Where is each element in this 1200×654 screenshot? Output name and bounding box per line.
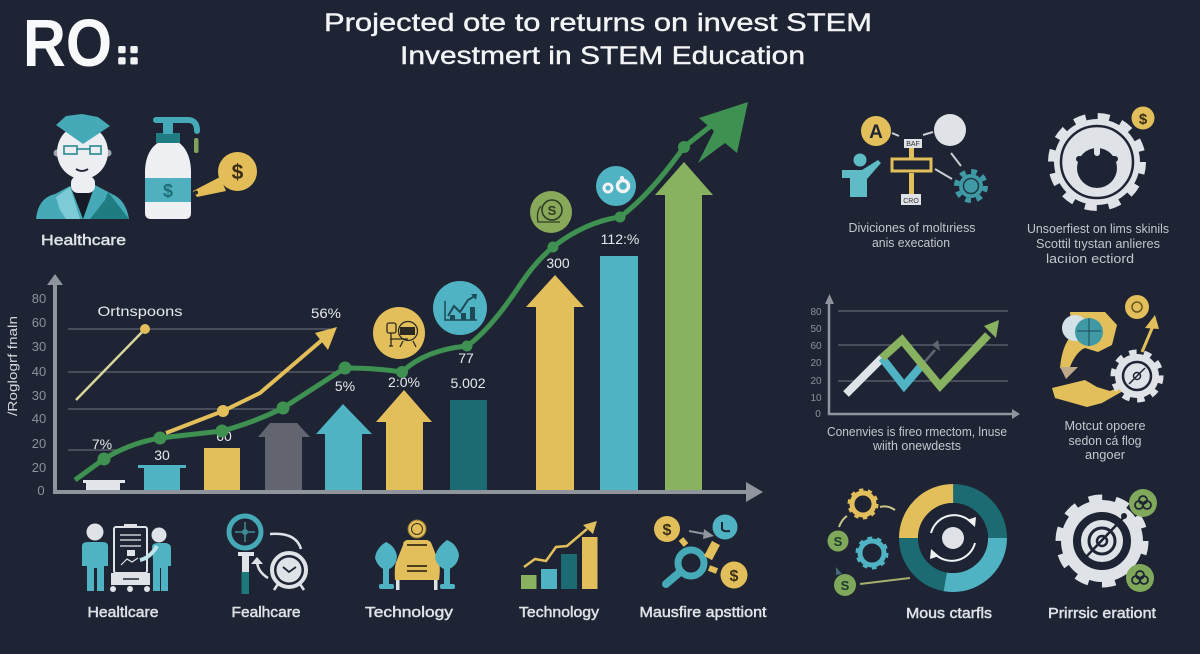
icon: blue circle chart — [433, 281, 487, 335]
icon: growth bars — [521, 521, 598, 589]
label: healtlcare: Healtlcare — [88, 605, 158, 621]
value labels: 77 — [458, 350, 474, 366]
label: technology right: Technology — [519, 605, 600, 621]
title — [324, 9, 872, 70]
y axis labels: 0 — [37, 483, 45, 498]
text: decisions: anis execation — [872, 236, 950, 250]
y axis labels: 20 — [32, 436, 46, 451]
text: skills — [1027, 222, 1169, 266]
y axis labels: 80 — [32, 291, 46, 306]
icon: target gear — [1059, 489, 1157, 592]
donut chart — [901, 486, 1005, 590]
label: technology left: Technology — [365, 605, 454, 621]
y axis title: /Roglogrf fnaln — [5, 316, 20, 416]
y axis labels: 40 — [32, 364, 46, 379]
icon: hand, gears and coin — [1052, 295, 1161, 407]
yellow trend arrow — [166, 327, 337, 433]
logo: RO::: RO — [23, 6, 112, 81]
mini line chart: 80 — [810, 307, 822, 318]
text: skills: lacıion ectiord — [1046, 252, 1134, 266]
icon: measure magnifier with coins: $ — [730, 568, 739, 585]
icon: blue gears circle — [596, 166, 636, 206]
icon: technology machine and trees — [375, 520, 459, 590]
main chart — [5, 102, 763, 502]
y axis labels: 30 — [32, 388, 46, 403]
icon: measure magnifier with coins — [654, 514, 748, 588]
text: decisions: Diviciones of moltıriess — [848, 221, 976, 235]
bottle: $ — [163, 181, 173, 201]
bars — [83, 162, 713, 490]
text: conveys: wiith onewdests — [872, 439, 961, 453]
value labels: 2:0% — [388, 374, 420, 390]
icon: gears and coins beside donut — [828, 491, 910, 596]
title: Projected ote to returns on invest STEM — [324, 9, 872, 37]
pale line with dot — [76, 324, 150, 400]
text: output: sedon cá flog — [1068, 434, 1142, 448]
y axis labels: 20 — [32, 460, 46, 475]
text: skills: Scottil tıystan anlieres — [1036, 237, 1160, 251]
icon: decisions diagram: BAF — [906, 141, 920, 148]
coin on magnifier handle: $ — [232, 161, 244, 184]
icon: large gear with coin: $ — [1139, 111, 1148, 128]
coin on magnifier handle — [193, 152, 257, 197]
bottle — [145, 120, 198, 219]
label: primary: Prirrsic erationt — [1048, 606, 1156, 622]
mini line chart: 20 — [810, 358, 822, 369]
y axis labels — [32, 291, 46, 498]
value labels: Ortnspoons — [98, 303, 182, 319]
label: fealhcare: Fealhcare — [232, 605, 300, 621]
mini line chart: 10 — [810, 393, 822, 404]
value labels: 7% — [92, 436, 112, 452]
icon: decisions diagram: A — [869, 122, 883, 143]
icon: large gear with coin — [1052, 106, 1154, 207]
text: output: Motcut opoere — [1064, 419, 1146, 433]
y axis labels: 40 — [32, 411, 46, 426]
mini line chart — [810, 294, 1020, 420]
mini line chart: 50 — [810, 324, 822, 335]
icon: decisions diagram — [842, 114, 986, 205]
icon: measure magnifier with coins: $ — [663, 522, 672, 539]
text: conveys — [827, 425, 1007, 453]
icon: gears and coins beside donut: S — [834, 534, 843, 549]
text: output — [1064, 419, 1146, 462]
icon: healthcare doctor and bottle — [36, 114, 257, 219]
mini line chart: 60 — [810, 341, 822, 352]
mini line chart: 20 — [810, 376, 822, 387]
title: Investmert in STEM Education — [400, 42, 805, 70]
value labels: 30 — [154, 447, 170, 463]
value labels: 60 — [216, 428, 232, 444]
label: mous ctarfls: Mous ctarfls — [906, 606, 992, 622]
green trend arrow — [75, 102, 748, 480]
mini line chart: 0 — [815, 409, 821, 420]
axes — [47, 274, 763, 502]
label: healthcare top: Healthcare — [41, 233, 126, 249]
doctor — [36, 114, 129, 219]
logo: RO::: :: — [117, 35, 141, 70]
icon: magnifier and clock — [229, 516, 307, 594]
icon: green money circle — [530, 191, 572, 233]
label: measure: Mausfire apsttiont — [640, 605, 766, 621]
value labels: 5.002 — [450, 375, 486, 391]
value labels: 300 — [546, 255, 570, 271]
icon: bottom healthcare team — [82, 524, 171, 592]
icon: green money circle: S — [548, 203, 557, 218]
icon: yellow circle equipment — [373, 307, 425, 359]
text: conveys: Conenvies is fireo rmectom, lnuse — [827, 425, 1007, 439]
y axis labels: 60 — [32, 315, 46, 330]
value labels: 112:% — [601, 231, 639, 247]
y axis labels: 30 — [32, 339, 46, 354]
value labels — [92, 231, 639, 463]
text: output: angoer — [1085, 448, 1125, 462]
icon: gears and coins beside donut: S — [841, 578, 850, 593]
value labels: 5% — [335, 378, 355, 394]
text: skills: Unsoerfiest on lims skinils — [1027, 222, 1169, 236]
value labels: 56% — [311, 305, 341, 321]
icon: decisions diagram: CRO — [903, 198, 919, 205]
text: decisions — [848, 221, 976, 250]
